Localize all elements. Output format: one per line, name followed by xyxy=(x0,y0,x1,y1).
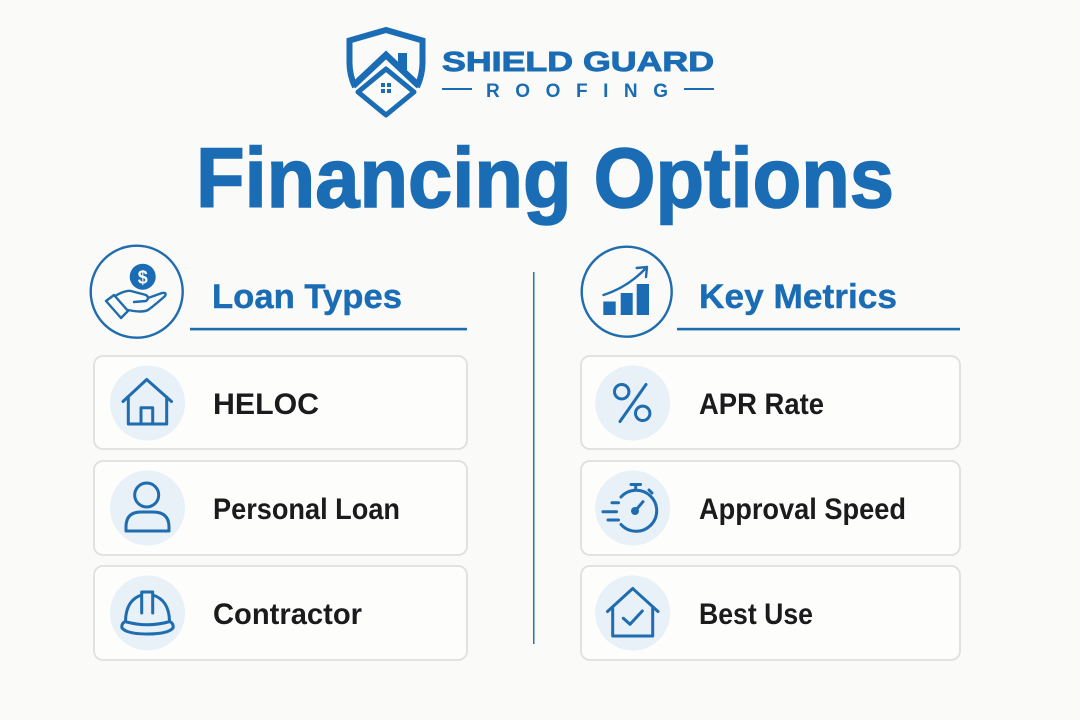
wordmark: Shield Guard: SHIELD GUARD xyxy=(442,46,714,77)
card: Personal Loan xyxy=(94,461,467,555)
icon: percent xyxy=(614,384,650,422)
label: Personal Loan: Personal Loan xyxy=(213,493,400,526)
section header: Key Metrics xyxy=(582,247,960,337)
panel: Key Metrics xyxy=(581,247,960,660)
label: Best Use: Best Use xyxy=(699,598,813,631)
heading: Loan Types: Loan Types xyxy=(212,278,402,316)
section header: Loan Types xyxy=(91,246,467,338)
label: HELOC: HELOC xyxy=(213,388,319,421)
icon: stopwatch xyxy=(603,484,657,531)
center divider xyxy=(533,272,534,644)
card: Best Use xyxy=(581,566,960,660)
title: Financing Options xyxy=(196,131,894,225)
icon: growth chart xyxy=(582,247,672,337)
card: HELOC xyxy=(94,356,467,449)
wordmark: Roofing: ROOFING xyxy=(486,81,668,102)
panel: Loan Types xyxy=(91,246,467,660)
icon: house with checkmark xyxy=(608,588,658,636)
label: Approval Speed: Approval Speed xyxy=(699,493,906,526)
heading: Key Metrics: Key Metrics xyxy=(699,278,897,316)
icon: hand holding coin: $ xyxy=(138,268,148,288)
logo: Shield Guard Roofing xyxy=(349,30,714,115)
icon: hand holding coin xyxy=(91,246,183,338)
card: Approval Speed xyxy=(581,461,960,555)
icon: house xyxy=(123,380,172,424)
label: Contractor: Contractor xyxy=(213,598,363,631)
label: APR Rate: APR Rate xyxy=(699,388,824,421)
icon: person xyxy=(126,483,169,531)
icon: hard hat xyxy=(122,592,173,634)
card: Contractor xyxy=(94,566,467,660)
card: APR Rate xyxy=(581,356,960,449)
icon: shield with house xyxy=(349,30,423,115)
